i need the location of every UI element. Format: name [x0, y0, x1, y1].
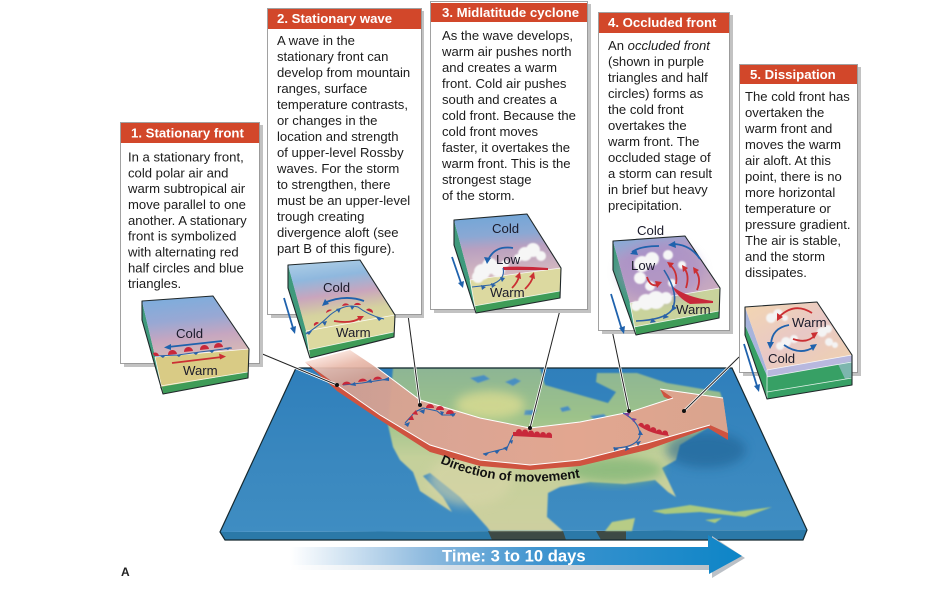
time arrow [290, 535, 745, 578]
text block 3: south and creates a [442, 92, 558, 107]
icon: block diagram 2 stationary wave: Cold [323, 280, 350, 295]
text block 2: temperature contrasts, [277, 97, 408, 112]
text block 2: must be an upper-level [277, 193, 410, 208]
text block 4: warm front. The [607, 134, 699, 149]
text block 5: air aloft. At this [745, 153, 831, 168]
text block 2 [276, 33, 410, 256]
text block 2: to strengthen, there [277, 177, 391, 192]
text block 1: front is symbolized [128, 228, 236, 244]
text block 3: warm front. This is the [441, 156, 571, 171]
heading 1: 1. Stationary front [131, 126, 244, 140]
heading 5: 5. Dissipation [750, 67, 836, 82]
icon: block diagram 2 stationary wave [284, 260, 395, 358]
text block 1: In a stationary front, [128, 150, 244, 164]
text block 4: triangles and half [608, 70, 708, 85]
text block 5: warm front and [744, 121, 832, 136]
text block 5: dissipates. [745, 265, 807, 280]
panel: 1. stationary front [120, 122, 263, 367]
text block 1: warm subtropical air [127, 181, 246, 196]
icon: block diagram 1 stationary front: Warm [183, 363, 218, 378]
icon: block diagram 3 midlatitude cyclone: Warm [490, 285, 525, 300]
panel: 2. stationary wave [268, 8, 424, 318]
text block 1: move parallel to one [128, 197, 246, 212]
text block 1: with alternating red [127, 244, 239, 260]
text block 3: faster, it overtakes the [442, 140, 570, 155]
heading 3: 3. Midlatitude cyclone [442, 5, 579, 20]
text block 2: develop from mountain [277, 65, 410, 80]
text block 1: cold polar air and [128, 166, 228, 180]
text block 5: pressure gradient. [745, 217, 851, 232]
text block 4: a storm can result [608, 166, 712, 181]
text block 5: moves the warm [745, 137, 841, 152]
text block 2: divergence aloft (see [277, 225, 399, 240]
icon: block diagram 5 dissipation [744, 302, 852, 399]
text block 3: and creates a warm [442, 60, 557, 75]
text block 2: trough creating [277, 209, 364, 224]
text block 3: warm air pushes north [441, 44, 572, 59]
text block 3: front. Cold air pushes [442, 76, 567, 91]
text block 3: strongest stage [442, 172, 532, 187]
icon: block diagram 4 occluded front: Low [631, 258, 656, 273]
text block 4: the cold front [608, 102, 684, 117]
icon: block diagram 3 midlatitude cyclone [452, 214, 561, 313]
text block 5: and the storm [745, 249, 825, 264]
text block 5: The cold front has [745, 89, 850, 104]
text block 4: circles) forms as [608, 86, 704, 101]
text block 2: of upper-level Rossby [277, 145, 404, 160]
icon: block diagram 3 midlatitude cyclone: Low [496, 252, 521, 267]
text block 2: ranges, surface [277, 81, 367, 96]
text block 3: cold front moves [442, 124, 539, 139]
icon: block diagram 5 dissipation: Cold [768, 351, 795, 366]
text block 2: part B of this figure). [277, 241, 395, 256]
text block 5: more horizontal [745, 185, 835, 200]
panel: 3. midlatitude cyclone [430, 2, 591, 313]
time label: Time: 3 to 10 days [442, 546, 586, 566]
heading 2: 2. Stationary wave [277, 11, 392, 26]
text block 3 [441, 28, 576, 203]
text block 2: stationary front can [277, 49, 388, 64]
heading 4: 4. Occluded front [608, 15, 717, 30]
figure part label A: A [121, 565, 130, 579]
icon: block diagram 1 stationary front: Cold [176, 326, 203, 341]
icon: block diagram 4 occluded front: Cold [637, 223, 664, 238]
text block 5: The air is stable, [745, 233, 841, 248]
text block 5: overtaken the [745, 105, 824, 120]
text block 1: half circles and blue [128, 260, 244, 276]
icon: block diagram 3 midlatitude cyclone: Cold [492, 221, 519, 236]
text block 4: An occluded front [608, 38, 711, 53]
text block 1: another. A stationary [128, 213, 247, 228]
text block 1 [127, 150, 247, 291]
text block 3: of the storm. [442, 188, 515, 203]
icon: block diagram 4 occluded front: Warm [676, 302, 711, 317]
text block 2: waves. For the storm [276, 161, 399, 176]
text block 3: As the wave develops, [442, 28, 573, 43]
text block 5 [744, 89, 851, 280]
icon: block diagram 1 stationary front [142, 296, 249, 394]
text block 4 [607, 38, 712, 213]
icon: block diagram 5 dissipation: Warm [792, 315, 827, 330]
map of North America [220, 368, 807, 540]
panel: 5. dissipation [740, 64, 861, 376]
text block 4: overtakes the [608, 118, 687, 133]
text block 5: temperature or [745, 201, 832, 216]
label: direction of movement: Direction of movement [440, 455, 580, 482]
text block 2: location and strength [277, 129, 399, 144]
icon: block diagram 2 stationary wave: Warm [336, 325, 371, 340]
icon: block diagram 4 occluded front [611, 223, 720, 335]
direction of movement arrow [305, 350, 728, 482]
text block 2: A wave in the [277, 33, 355, 48]
text block 2: or changes in the [277, 113, 377, 128]
text block 5: point, there is no [745, 169, 842, 184]
text block 3: cold front. Because the [442, 108, 576, 123]
panel: 4. occluded front [598, 12, 733, 334]
text block 4: precipitation. [608, 198, 682, 213]
text block 4: occluded stage of [608, 150, 711, 165]
text block 1: triangles. [128, 276, 181, 291]
leader lines [260, 310, 739, 430]
text block 4: in brief but heavy [608, 182, 708, 197]
map fronts [342, 377, 669, 456]
text block 4: (shown in purple [608, 54, 704, 69]
